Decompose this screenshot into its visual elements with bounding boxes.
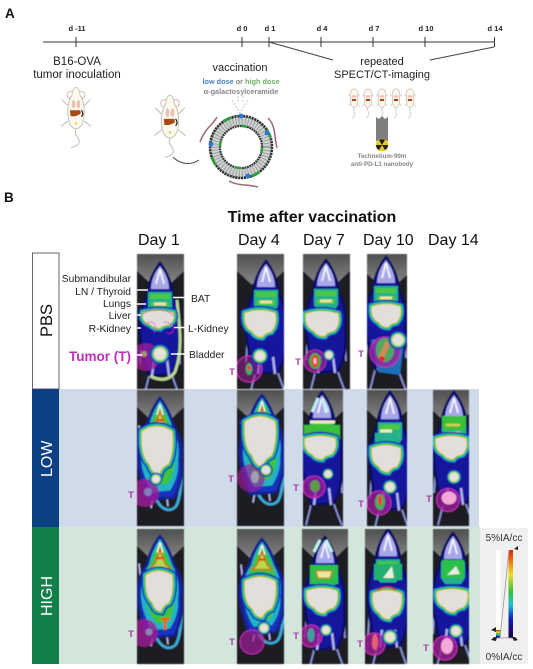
icon: liposome (200, 96, 277, 187)
icon: vaccinated mouse (154, 95, 186, 158)
tumor T markers: T (293, 631, 299, 642)
column headings (138, 232, 479, 249)
scan: HIGH day 14 (432, 528, 470, 665)
organ labels: Bladder (189, 350, 225, 361)
panel A: timeline: d 1 (265, 24, 275, 33)
scan: HIGH day 1 (136, 528, 185, 665)
scan: LOW day 14 (432, 389, 470, 527)
organ labels: L-Kidney (188, 324, 229, 335)
text: tumor inoculation: tumor inoculation (33, 69, 121, 81)
heading: time after vaccination: Time after vaccination (228, 209, 396, 226)
panel letter A: A (5, 6, 15, 21)
tumor T markers (128, 349, 432, 654)
organ labels: LN / Thyroid (75, 287, 131, 298)
row label: LOW: LOW (39, 440, 56, 477)
text: repeated SPECT/CT-imaging: repeated (360, 56, 404, 68)
panel A: timeline: d -11 (68, 24, 86, 33)
label: tumor: Tumor (T) (69, 349, 131, 364)
icon: five imaged mice (348, 89, 416, 118)
tumor T markers: T (295, 357, 301, 368)
organ labels: Lungs (103, 299, 131, 310)
tumor T markers: T (426, 494, 432, 505)
organ labels: BAT (191, 294, 211, 305)
column headings: Day 1 (138, 232, 180, 249)
text: tracer label: Technetium-99m (358, 153, 407, 160)
scan: PBS day 1 (136, 253, 185, 390)
icon: inoculated mouse (61, 87, 91, 148)
tumor T markers: T (229, 367, 235, 378)
column headings: Day 4 (238, 232, 280, 249)
scan: LOW day 1 (136, 389, 185, 527)
row label: HIGH: HIGH (39, 576, 56, 616)
scan images (130, 254, 476, 669)
scan: LOW day 4 (236, 389, 285, 527)
panel A: timeline: d 4 (317, 24, 328, 33)
tumor T markers: T (358, 499, 364, 510)
scan: HIGH day 4 (236, 528, 285, 665)
panel: HIGH row background (59, 527, 480, 664)
row label: PBS: PBS (38, 304, 56, 337)
scan: PBS day 7 (302, 253, 351, 390)
panel letter B: B (4, 190, 14, 205)
text: tumor inoculation: B16-OVA (53, 56, 101, 68)
column headings: Day 7 (303, 232, 345, 249)
tumor T markers: T (358, 349, 364, 360)
panel: LOW row background (59, 389, 479, 527)
scan: LOW day 7 (302, 389, 344, 527)
scan: HIGH day 10 (364, 528, 408, 665)
text: vaccination: vaccination (212, 62, 268, 74)
panel A: timeline: d 0 (237, 24, 247, 33)
organ label arrows (137, 290, 185, 355)
colour scale legend (480, 528, 528, 664)
tumor T markers: T (128, 629, 134, 640)
scan: PBS day 4 (236, 253, 285, 390)
text: repeated SPECT/CT-imaging: SPECT/CT-imaging (334, 69, 430, 81)
tumor T markers: T (228, 474, 234, 485)
panel A: timeline: d 7 (369, 24, 379, 33)
panel A: timeline (43, 24, 503, 60)
tumor T markers: T (423, 643, 429, 654)
column headings: Day 14 (428, 232, 479, 249)
scan: LOW day 10 (366, 389, 408, 527)
tumor T markers: T (128, 490, 134, 501)
text: dose legend: α-galactosylceramide (204, 87, 278, 96)
column headings: Day 10 (363, 232, 414, 249)
tumor T markers: T (357, 639, 363, 650)
panel A: timeline: d 14 (487, 24, 503, 33)
row label: HIGH (32, 527, 59, 664)
organ labels: Liver (109, 311, 132, 322)
tumor T markers: T (229, 637, 235, 648)
tumor T markers: T (293, 483, 299, 494)
organ labels: R-Kidney (89, 324, 132, 335)
panel A: timeline: d 10 (418, 24, 434, 33)
row label: PBS (32, 253, 59, 389)
colour scale legend: 0%IA/cc (486, 652, 522, 663)
text: dose legend: low dose or high dose (202, 77, 280, 86)
scan: HIGH day 7 (301, 528, 349, 665)
scan: PBS day 10 (366, 253, 408, 390)
row label: LOW (32, 389, 59, 527)
icon: tracer vial with radiation symbol (376, 116, 388, 151)
organ labels (62, 274, 229, 361)
organ labels: Submandibular (62, 274, 132, 285)
icon: injection arrow (173, 157, 199, 164)
colour scale legend: 5%IA/cc (486, 533, 522, 544)
text: tracer label: anti-PD-L1 nanobody (351, 161, 414, 168)
